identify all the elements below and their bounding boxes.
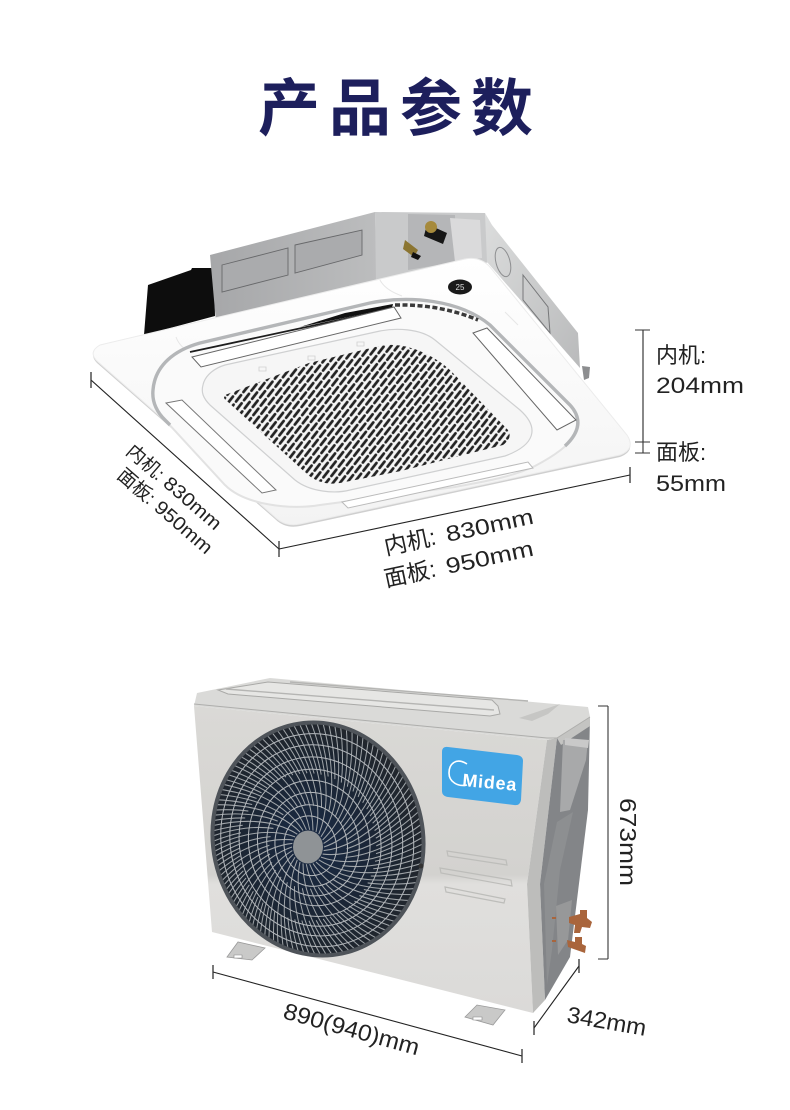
dimension: panel width bottom: [279, 467, 630, 592]
bevel: [527, 738, 557, 1013]
label: 204mm: [656, 373, 744, 398]
display: 25: [456, 283, 465, 292]
dimension: height right: [635, 330, 744, 496]
label: 面板:: [113, 464, 160, 509]
louver: top: [192, 307, 401, 367]
label: [122, 440, 226, 535]
label: [382, 503, 536, 560]
label: 673mm: [615, 798, 641, 886]
logo: Midea: [442, 747, 523, 805]
dimension: outdoor height: [598, 706, 641, 959]
label: 内机:: [122, 440, 169, 485]
pipe connection area: [375, 212, 490, 285]
label: 950mm: [443, 536, 536, 579]
unit body right side: [485, 213, 590, 380]
air outlet ring: [153, 299, 579, 507]
label: 内机:: [656, 343, 706, 368]
black side box: [144, 268, 215, 335]
status icons: [259, 342, 364, 371]
grille: [224, 345, 510, 484]
logo: Midea: Midea: [462, 770, 518, 795]
dimension: outdoor width: [213, 965, 522, 1063]
vents: [440, 851, 512, 903]
unit body left side: [210, 212, 377, 322]
label: 面板:: [656, 440, 706, 465]
label: 55mm: [656, 471, 726, 496]
illustration: outdoor unit: [171, 678, 592, 1025]
label: 面板:: [382, 556, 438, 592]
label: 830mm: [443, 504, 536, 547]
fan hub: [293, 830, 323, 864]
label: 342mm: [565, 1001, 648, 1041]
inner return-air plate: [202, 329, 532, 492]
side panel: [540, 717, 590, 1000]
fan spiral wires: [214, 724, 422, 954]
feet: [227, 942, 505, 1025]
label: 内机:: [382, 524, 438, 560]
label: [113, 464, 217, 559]
dimension: panel depth left: [91, 372, 279, 559]
illustration: indoor cassette unit: [93, 212, 630, 527]
label: 830mm: [159, 473, 225, 535]
display: [448, 280, 472, 294]
top cover: [194, 678, 590, 740]
fan guard: [210, 720, 426, 958]
front face: [194, 706, 547, 1013]
label: 950mm: [150, 497, 216, 559]
dimension: outdoor depth: [534, 959, 648, 1041]
label: [382, 535, 536, 592]
label: 890(940)mm: [281, 998, 423, 1060]
louver: bottom: [342, 462, 533, 508]
louver: right: [473, 328, 576, 430]
copper pipes: [552, 910, 592, 953]
louver: left: [166, 400, 276, 493]
title: 产品参数: [258, 75, 542, 144]
ceiling panel: [93, 258, 630, 527]
